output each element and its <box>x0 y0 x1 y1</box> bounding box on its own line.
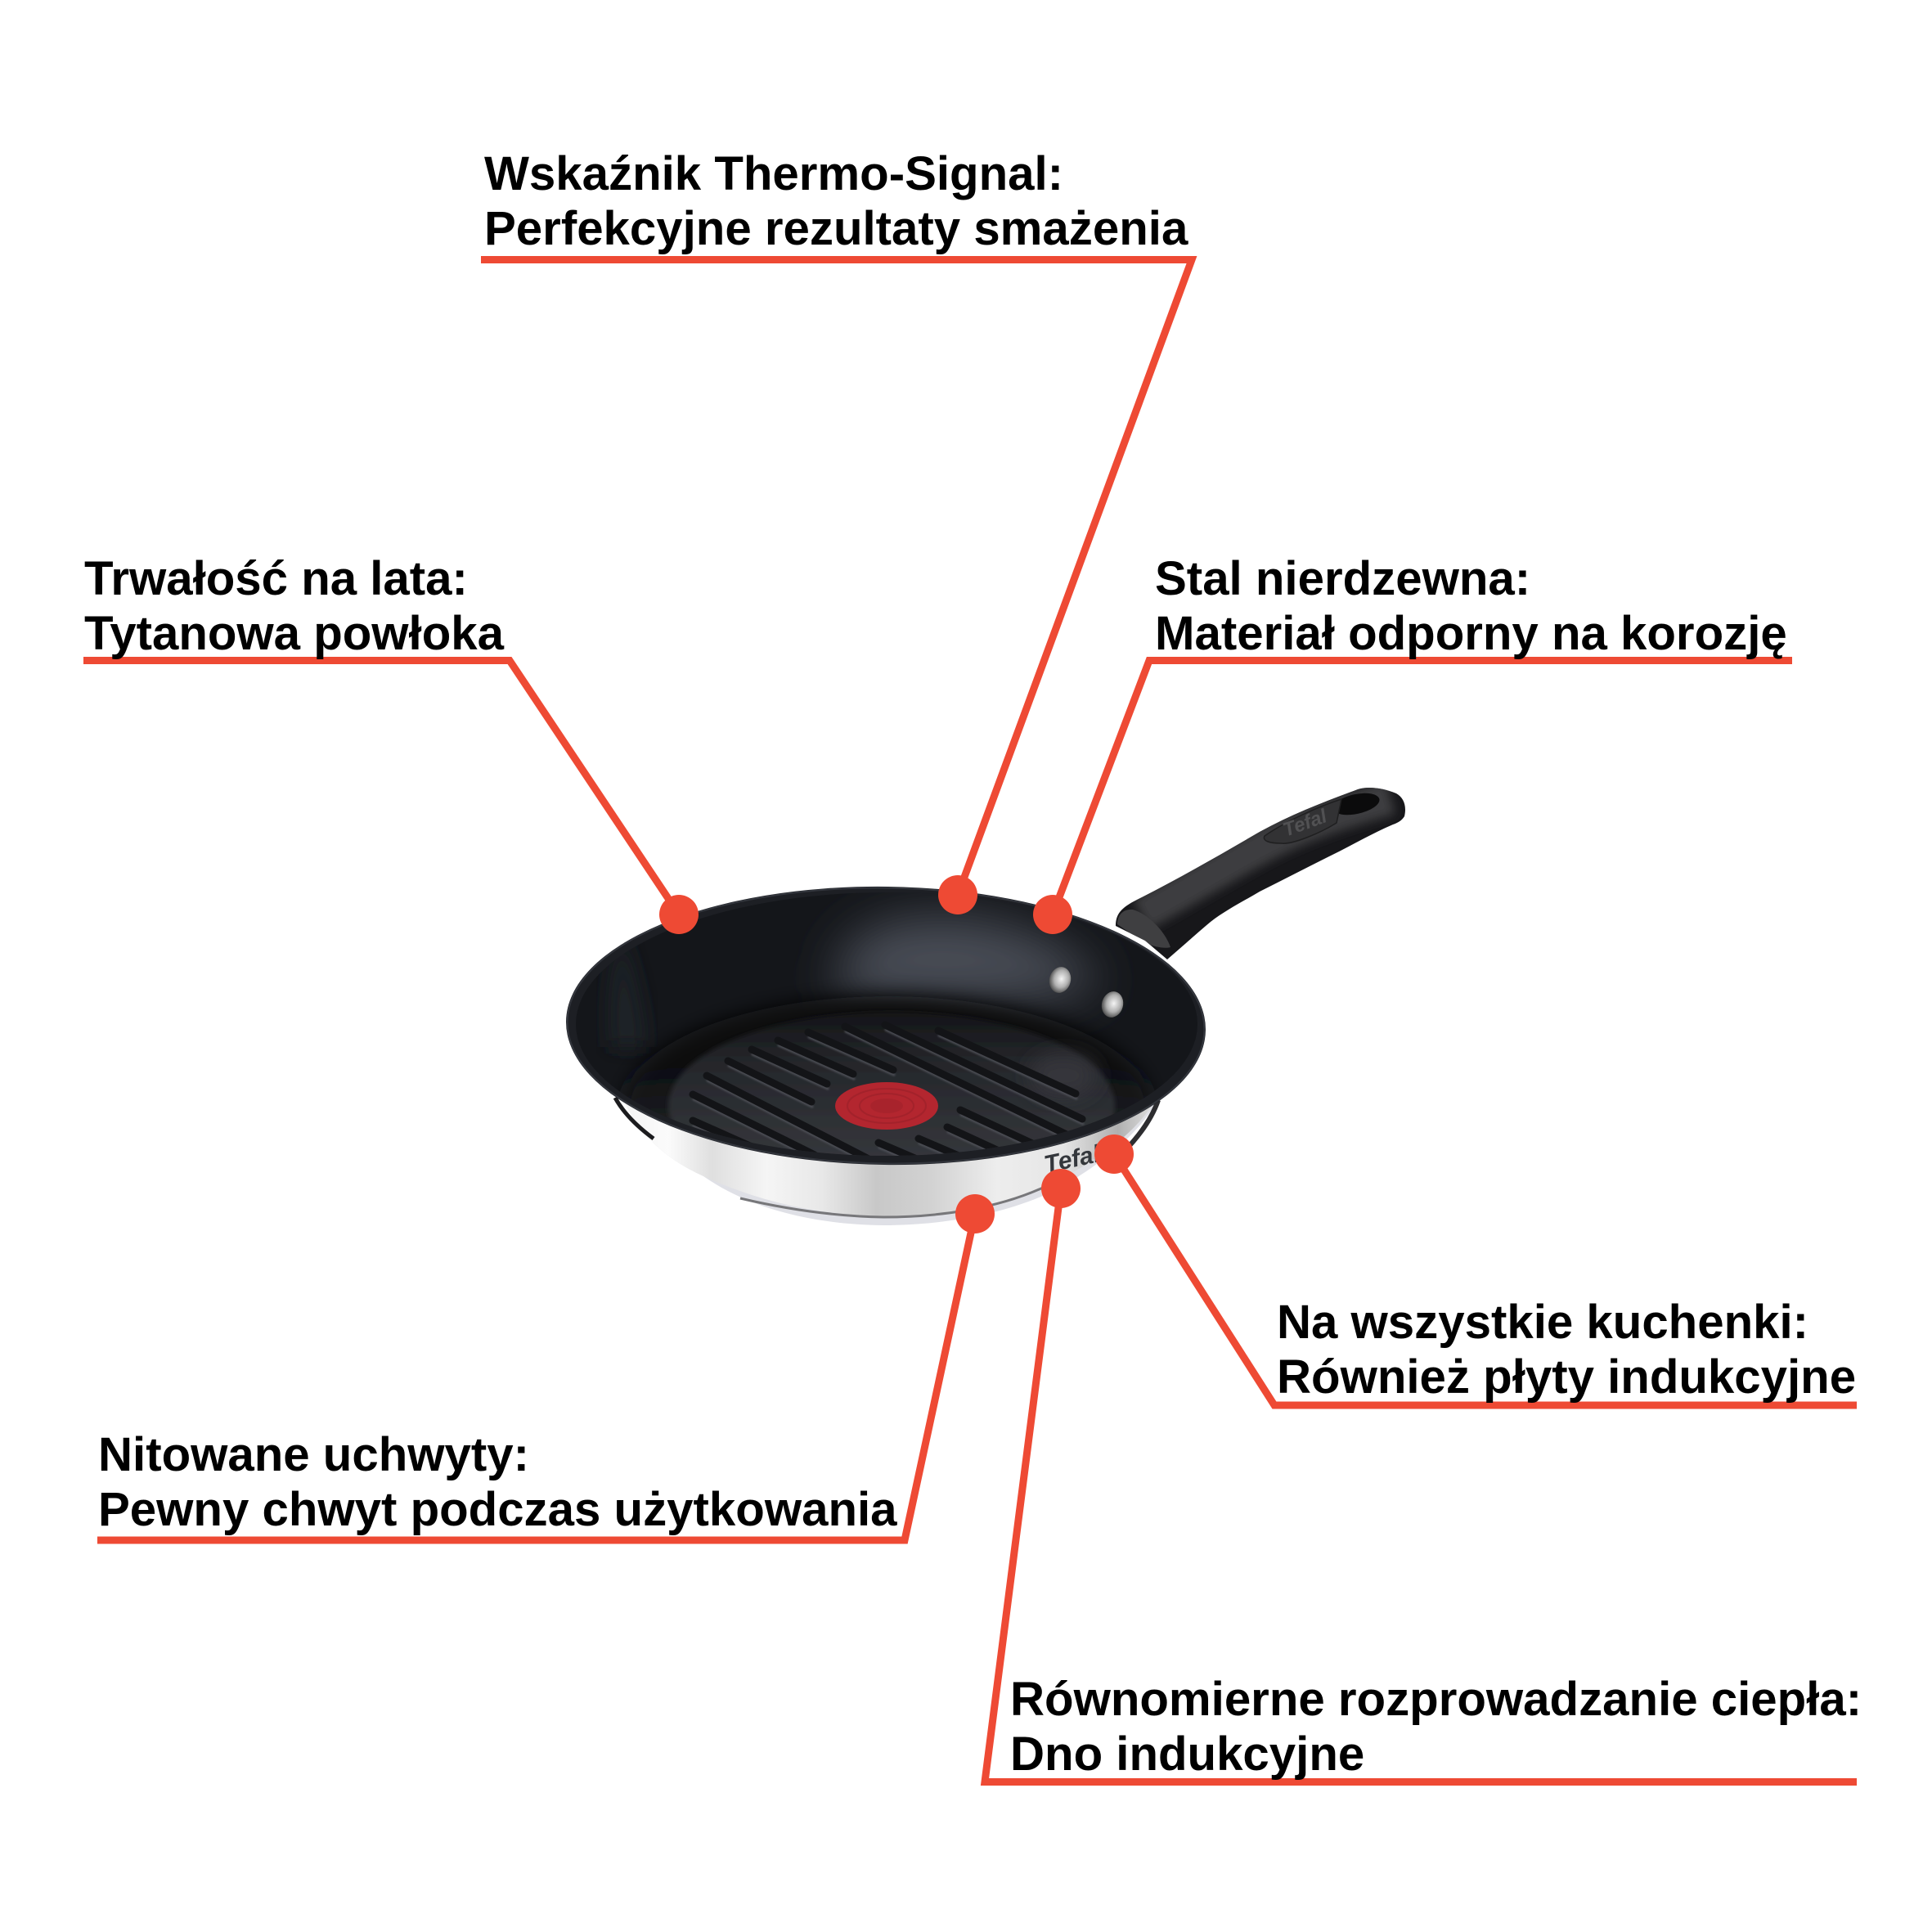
callout text: Na wszystkie kuchenki: <box>1277 1296 1808 1349</box>
callout text: Również płyty indukcyjne <box>1277 1350 1856 1404</box>
callout text: Dno indukcyjne <box>1010 1728 1364 1781</box>
callout: even heat <box>985 1169 1862 1781</box>
thermo-signal spot <box>835 1082 938 1130</box>
handle logo: Tefal <box>1280 805 1331 842</box>
steel body <box>615 1096 1160 1225</box>
floor highlight <box>1029 1053 1098 1099</box>
leader line <box>83 661 679 914</box>
pan interior <box>576 893 1197 1156</box>
leader line <box>97 1214 975 1540</box>
leader line <box>1053 661 1792 914</box>
callout text: Wskaźnik Thermo-Signal: <box>484 147 1063 200</box>
callout: titanium coating <box>83 552 699 934</box>
pan rim <box>564 883 1207 1169</box>
callout text: Równomierne rozprowadzanie ciepła: <box>1010 1673 1862 1726</box>
pan handle <box>1116 788 1405 959</box>
marker dot <box>659 895 699 934</box>
body logo: Tefal <box>1042 1140 1103 1179</box>
callout text: Stal nierdzewna: <box>1155 552 1530 605</box>
marker dot <box>1094 1134 1134 1174</box>
callout text: Nitowane uchwyty: <box>98 1428 529 1481</box>
callout: stainless steel <box>1033 552 1792 934</box>
leader line <box>985 1188 1857 1781</box>
callout text: Tytanowa powłoka <box>84 607 505 660</box>
callout: all hobs <box>1094 1134 1857 1405</box>
rivets <box>1046 964 1126 1020</box>
illustration: grill frying pan <box>556 788 1405 1225</box>
pan floor <box>667 1013 1116 1156</box>
callout text: Trwałość na lata: <box>84 552 468 605</box>
leader line <box>481 260 1192 895</box>
callout: riveted handles <box>97 1194 995 1540</box>
marker dot <box>1041 1169 1081 1208</box>
callout text: Materiał odporny na korozję <box>1155 607 1787 660</box>
marker dot <box>955 1194 995 1233</box>
callout: Thermo-Signal <box>481 147 1192 914</box>
floor shadow <box>629 985 1146 1116</box>
grill grooves <box>693 1025 1083 1165</box>
marker dot <box>938 875 977 914</box>
callout text: Perfekcyjne rezultaty smażenia <box>484 202 1188 255</box>
callout text: Pewny chwyt podczas użytkowania <box>98 1483 897 1536</box>
interior wall highlight <box>834 916 1104 1002</box>
marker dot <box>1033 895 1072 934</box>
leader line <box>1114 1154 1857 1405</box>
